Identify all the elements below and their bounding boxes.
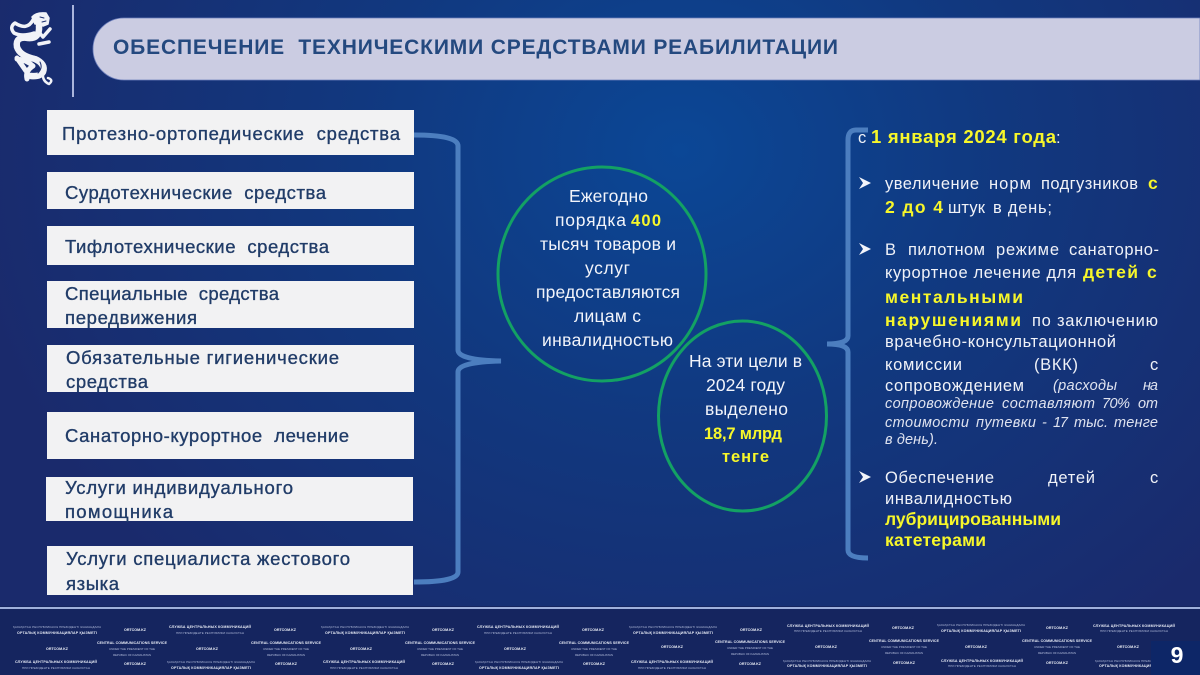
bullet 3: catheters: инвалидностью — [885, 490, 1012, 508]
footer logos row 1: ПРИ ПРЕЗИДЕНТЕ РЕСПУБЛИКИ КАЗАХСТАН — [794, 629, 862, 633]
bullet 2: sanatorium treatment: сопровождение — [885, 396, 994, 412]
bullet 3: catheters: катетерами — [885, 530, 986, 550]
footer logos row 1: ПРИ ПРЕЗИДЕНТЕ РЕСПУБЛИКИ КАЗАХСТАН — [484, 631, 552, 635]
circle: funding: 18,7 млрд — [704, 425, 783, 443]
title text: ОБЕСПЕЧЕНИЕ ТЕХНИЧЕСКИМИ СРЕДСТВАМИ РЕАБИЛИТАЦИИ — [113, 36, 838, 59]
item 7: помощника — [65, 501, 174, 522]
item 2: Сурдотехнические средства — [65, 182, 327, 203]
bullet 2: sanatorium treatment: стоимости — [885, 415, 969, 431]
item 3: Тифлотехнические средства — [65, 236, 330, 257]
footer logos row 1: ҚАЗАҚСТАН РЕСПУБЛИКАСЫ ПРЕЗИДЕНТІ ЖАНЫНДАҒЫ — [13, 625, 101, 629]
footer logos row 1: ҚАЗАҚСТАН РЕСПУБЛИКАСЫ ПРЕЗИДЕНТІ ЖАНЫНДАҒЫ — [937, 623, 1025, 627]
footer logos row 2: CENTRAL COMMUNICATIONS SERVICE — [1022, 639, 1093, 643]
circle: funding: выделено — [705, 399, 788, 419]
footer logos row 1: СЛУЖБА ЦЕНТРАЛЬНЫХ КОММУНИКАЦИЙ — [477, 625, 559, 629]
bullet 1: diapers: в день; — [993, 199, 1052, 217]
bullet 2: sanatorium treatment: В — [885, 241, 896, 259]
bullet 2: sanatorium treatment: санаторно- — [1069, 241, 1159, 259]
item 5: Обязательные гигиенические — [66, 347, 339, 368]
heading: с — [858, 129, 866, 147]
footer logos row 3: ORTCOM.KZ — [432, 662, 455, 666]
item 5 — [47, 345, 414, 392]
circle: annual volume: предоставляются — [536, 282, 680, 302]
footer logos row 2: ORTCOM.KZ — [196, 647, 219, 651]
circle: annual volume: лицам с — [574, 306, 641, 326]
circle: funding: На эти цели в — [689, 351, 802, 371]
footer logos row 3: ORTCOM.KZ — [583, 662, 606, 666]
footer logos row 3: ОРТАЛЫҚ КОММУНИКАЦИЯЛАР ҚЫЗМЕТІ — [171, 666, 251, 670]
footer logos row 1: СЛУЖБА ЦЕНТРАЛЬНЫХ КОММУНИКАЦИЙ — [1093, 624, 1175, 628]
bullet 3: catheters: лубрицированными — [885, 509, 1061, 529]
item 2 — [47, 172, 414, 209]
item 7: Услуги индивидуального — [65, 477, 293, 498]
bullet 2: sanatorium treatment: ментальными — [885, 287, 1023, 307]
footer logos row 2: UNDER THE PRESIDENT OF THE — [1034, 645, 1080, 649]
page number — [1151, 641, 1200, 675]
footer logos row 2: REPUBLIC OF KAZAKHSTAN — [575, 653, 613, 657]
footer logos row 3: ORTCOM.KZ — [275, 662, 298, 666]
bullet 2: sanatorium treatment: пилотном — [908, 241, 985, 259]
right brace — [827, 130, 868, 558]
circle: annual volume: 400 — [631, 212, 661, 230]
footer logos row 2: REPUBLIC OF KAZAKHSTAN — [1038, 651, 1076, 655]
bullet 2: sanatorium treatment: в день). — [885, 432, 938, 448]
item 3 — [47, 226, 414, 265]
footer logos row 3: СЛУЖБА ЦЕНТРАЛЬНЫХ КОММУНИКАЦИЙ — [941, 659, 1023, 663]
footer logos row 1: ПРИ ПРЕЗИДЕНТЕ РЕСПУБЛИКИ КАЗАХСТАН — [176, 631, 244, 635]
bullet 3: catheters: детей — [1048, 469, 1095, 487]
footer logos row 1: ОРТАЛЫҚ КОММУНИКАЦИЯЛАР ҚЫЗМЕТІ — [941, 629, 1021, 633]
item 6: Санаторно-курортное лечение — [65, 425, 349, 446]
item 7 — [46, 477, 413, 522]
circle: annual volume: инвалидностью — [542, 330, 673, 350]
footer logos row 3: ОРТАЛЫҚ КОММУНИКАЦИЯЛАР ҚЫЗМЕТІ — [1099, 664, 1179, 668]
item 8: языка — [66, 573, 120, 594]
footer logos row 3: СЛУЖБА ЦЕНТРАЛЬНЫХ КОММУНИКАЦИЙ — [323, 660, 405, 664]
item 1: Протезно-ортопедические средства — [62, 123, 401, 144]
footer logos row 1: ПРИ ПРЕЗИДЕНТЕ РЕСПУБЛИКИ КАЗАХСТАН — [1100, 629, 1168, 633]
footer logos row 3: ОРТАЛЫҚ КОММУНИКАЦИЯЛАР ҚЫЗМЕТІ — [787, 664, 867, 668]
bullet 2: sanatorium treatment: (расходы — [1053, 378, 1117, 394]
footer logos row 2: REPUBLIC OF KAZAKHSTAN — [421, 653, 459, 657]
item 4: Специальные средства — [65, 283, 280, 304]
item 8 — [47, 546, 413, 595]
footer logos row 3: ҚАЗАҚСТАН РЕСПУБЛИКАСЫ ПРЕЗИДЕНТІ ЖАНЫНДАҒЫ — [1095, 659, 1183, 663]
item 4 — [47, 281, 414, 328]
footer logos row 1: ORTCOM.KZ — [1046, 626, 1069, 630]
bullet 2: sanatorium treatment: режиме — [996, 241, 1059, 259]
footer logos row 3: ORTCOM.KZ — [1046, 661, 1069, 665]
bullet 2: sanatorium treatment: (ВКК) — [1034, 356, 1078, 374]
footer logos row 2: CENTRAL COMMUNICATIONS SERVICE — [715, 640, 786, 644]
bullet 1: diapers: норм — [989, 175, 1031, 193]
footer logos row 1: СЛУЖБА ЦЕНТРАЛЬНЫХ КОММУНИКАЦИЙ — [169, 625, 251, 629]
bullet 2: sanatorium treatment: - — [1042, 415, 1047, 431]
footer logos row 2: UNDER THE PRESIDENT OF THE — [417, 647, 463, 651]
circle: annual volume: тысяч товаров и — [540, 234, 676, 254]
footer logos row 2: CENTRAL COMMUNICATIONS SERVICE — [251, 641, 322, 645]
footer logos row 1: ORTCOM.KZ — [124, 628, 147, 632]
footer logos row 3: ПРИ ПРЕЗИДЕНТЕ РЕСПУБЛИКИ КАЗАХСТАН — [22, 666, 90, 670]
bullet 2: sanatorium treatment: врачебно-консультационной — [885, 333, 1116, 351]
item 8: Услуги специалиста жестового — [66, 548, 350, 569]
footer logos row 3: ПРИ ПРЕЗИДЕНТЕ РЕСПУБЛИКИ КАЗАХСТАН — [330, 666, 398, 670]
bullet 2: sanatorium treatment: составляют — [1002, 396, 1095, 412]
panel: changes from 1 January 2024 — [858, 126, 1159, 550]
title banner — [93, 18, 1200, 80]
footer logos row 2: REPUBLIC OF KAZAKHSTAN — [731, 652, 769, 656]
item 4: передвижения — [65, 307, 197, 328]
bullet 2: sanatorium treatment: с — [1150, 356, 1158, 374]
bullet 2: sanatorium treatment: тенге — [1114, 415, 1158, 431]
footer logos row 2: CENTRAL COMMUNICATIONS SERVICE — [559, 641, 630, 645]
heading: 1 января 2024 года — [871, 126, 1057, 147]
footer logos row 3: ҚАЗАҚСТАН РЕСПУБЛИКАСЫ ПРЕЗИДЕНТІ ЖАНЫНДАҒЫ — [167, 660, 255, 664]
circle: funding: тенге — [722, 448, 769, 466]
bullet 1: diapers: с — [1148, 173, 1158, 193]
footer band — [0, 606, 1200, 675]
bullet 2: sanatorium treatment: детей — [1083, 262, 1138, 282]
panel: list of rehabilitation means — [46, 110, 414, 595]
bullet 2: sanatorium treatment: тыс. — [1074, 415, 1108, 431]
footer logos row 3: ОРТАЛЫҚ КОММУНИКАЦИЯЛАР ҚЫЗМЕТІ — [479, 666, 559, 670]
bullet 1: diapers: 2 до 4 — [885, 197, 943, 217]
bullet 2: sanatorium treatment: курортное лечение для — [885, 264, 1076, 282]
footer logos row 1: ORTCOM.KZ — [892, 626, 915, 630]
footer logos row 1 — [13, 623, 1175, 635]
footer logos row 1: СЛУЖБА ЦЕНТРАЛЬНЫХ КОММУНИКАЦИЙ — [787, 624, 869, 628]
circle: annual volume: порядка — [555, 210, 626, 230]
footer logos row 2: ORTCOM.KZ — [46, 647, 69, 651]
footer logos row 1: ОРТАЛЫҚ КОММУНИКАЦИЯЛАР ҚЫЗМЕТІ — [17, 631, 97, 635]
footer logos row 3: ҚАЗАҚСТАН РЕСПУБЛИКАСЫ ПРЕЗИДЕНТІ ЖАНЫНДАҒЫ — [783, 659, 871, 663]
footer logos row 1: ҚАЗАҚСТАН РЕСПУБЛИКАСЫ ПРЕЗИДЕНТІ ЖАНЫНДАҒЫ — [321, 625, 409, 629]
circle: annual volume: услуг — [585, 258, 630, 278]
footer logos row 1: ҚАЗАҚСТАН РЕСПУБЛИКАСЫ ПРЕЗИДЕНТІ ЖАНЫНДАҒЫ — [629, 625, 717, 629]
footer logos row 1: ОРТАЛЫҚ КОММУНИКАЦИЯЛАР ҚЫЗМЕТІ — [633, 631, 713, 635]
footer logos row 3: ҚАЗАҚСТАН РЕСПУБЛИКАСЫ ПРЕЗИДЕНТІ ЖАНЫНДАҒЫ — [475, 660, 563, 664]
bullet 3: catheters — [859, 469, 1158, 550]
circle: funding — [658, 321, 826, 511]
footer logos row 2: UNDER THE PRESIDENT OF THE — [571, 647, 617, 651]
bullet 2: sanatorium treatment: сопровождением — [885, 377, 1024, 395]
footer logos row 2: ORTCOM.KZ — [815, 645, 838, 649]
footer logos row 2: CENTRAL COMMUNICATIONS SERVICE — [869, 639, 940, 643]
bullet 2: sanatorium treatment: путевки — [976, 415, 1036, 431]
footer logos row 3: СЛУЖБА ЦЕНТРАЛЬНЫХ КОММУНИКАЦИЙ — [15, 660, 97, 664]
circle: annual volume: Ежегодно — [569, 186, 648, 206]
footer logos row 2: ORTCOM.KZ — [350, 647, 373, 651]
bullet 2: sanatorium treatment — [859, 241, 1159, 448]
footer logos row 3: ORTCOM.KZ — [739, 662, 762, 666]
logo: snow leopard emblem — [12, 13, 51, 84]
footer logos row 2: UNDER THE PRESIDENT OF THE — [109, 647, 155, 651]
bullet 2: sanatorium treatment: 70% — [1102, 396, 1130, 412]
bullet 2: sanatorium treatment: нарушениями — [885, 310, 1021, 330]
bullet 3: catheters: с — [1150, 469, 1158, 487]
footer logos row 1: ORTCOM.KZ — [432, 628, 455, 632]
bullet 2: sanatorium treatment: 17 — [1053, 415, 1069, 431]
circle: annual volume — [498, 167, 706, 381]
bullet 3: catheters: Обеспечение — [885, 469, 994, 487]
footer logos row 2: ORTCOM.KZ — [504, 647, 527, 651]
footer logos row 3: ORTCOM.KZ — [124, 662, 147, 666]
circle: funding: 2024 году — [706, 375, 785, 395]
item 1 — [47, 110, 414, 155]
footer logos row 2 — [46, 639, 1140, 657]
footer logos row 2: ORTCOM.KZ — [965, 645, 988, 649]
item 6 — [47, 412, 414, 459]
footer logos row 2: REPUBLIC OF KAZAKHSTAN — [267, 653, 305, 657]
footer logos row 3 — [15, 659, 1183, 670]
footer logos row 1: ORTCOM.KZ — [740, 628, 763, 632]
bullet 2: sanatorium treatment: по заключению — [1032, 312, 1158, 330]
bullet 1: diapers — [859, 173, 1158, 217]
footer logos row 2: UNDER THE PRESIDENT OF THE — [881, 645, 927, 649]
item 5: средства — [66, 371, 149, 392]
footer logos row 2: CENTRAL COMMUNICATIONS SERVICE — [405, 641, 476, 645]
footer logos row 3: ПРИ ПРЕЗИДЕНТЕ РЕСПУБЛИКИ КАЗАХСТАН — [948, 664, 1016, 668]
bullet 1: diapers: подгузников — [1041, 175, 1138, 193]
footer logos row 1: ОРТАЛЫҚ КОММУНИКАЦИЯЛАР ҚЫЗМЕТІ — [325, 631, 405, 635]
footer logos row 3: СЛУЖБА ЦЕНТРАЛЬНЫХ КОММУНИКАЦИЙ — [631, 660, 713, 664]
footer logos row 1: ORTCOM.KZ — [582, 628, 605, 632]
footer logos row 3: ПРИ ПРЕЗИДЕНТЕ РЕСПУБЛИКИ КАЗАХСТАН — [638, 666, 706, 670]
bullet 1: diapers: увеличение — [885, 175, 979, 193]
logo divider — [72, 5, 74, 97]
bullet 1: diapers: штук — [948, 199, 986, 217]
footer logos row 2: UNDER THE PRESIDENT OF THE — [727, 646, 773, 650]
bullet 2: sanatorium treatment: комиссии — [885, 356, 962, 374]
heading: : — [1056, 129, 1061, 147]
left brace — [414, 135, 501, 582]
footer logos row 2: REPUBLIC OF KAZAKHSTAN — [885, 651, 923, 655]
bullet 2: sanatorium treatment: от — [1138, 396, 1158, 412]
footer logos row 2: ORTCOM.KZ — [1117, 645, 1140, 649]
bullet 2: sanatorium treatment: с — [1147, 262, 1157, 282]
page number: 9 — [1171, 642, 1183, 668]
footer logos row 2: UNDER THE PRESIDENT OF THE — [263, 647, 309, 651]
footer logos row 2: ORTCOM.KZ — [661, 645, 684, 649]
footer logos row 2: REPUBLIC OF KAZAKHSTAN — [113, 653, 151, 657]
footer logos row 1: ORTCOM.KZ — [274, 628, 297, 632]
bullet 2: sanatorium treatment: на — [1143, 378, 1158, 394]
footer logos row 2: CENTRAL COMMUNICATIONS SERVICE — [97, 641, 168, 645]
footer logos row 3: ORTCOM.KZ — [893, 661, 916, 665]
